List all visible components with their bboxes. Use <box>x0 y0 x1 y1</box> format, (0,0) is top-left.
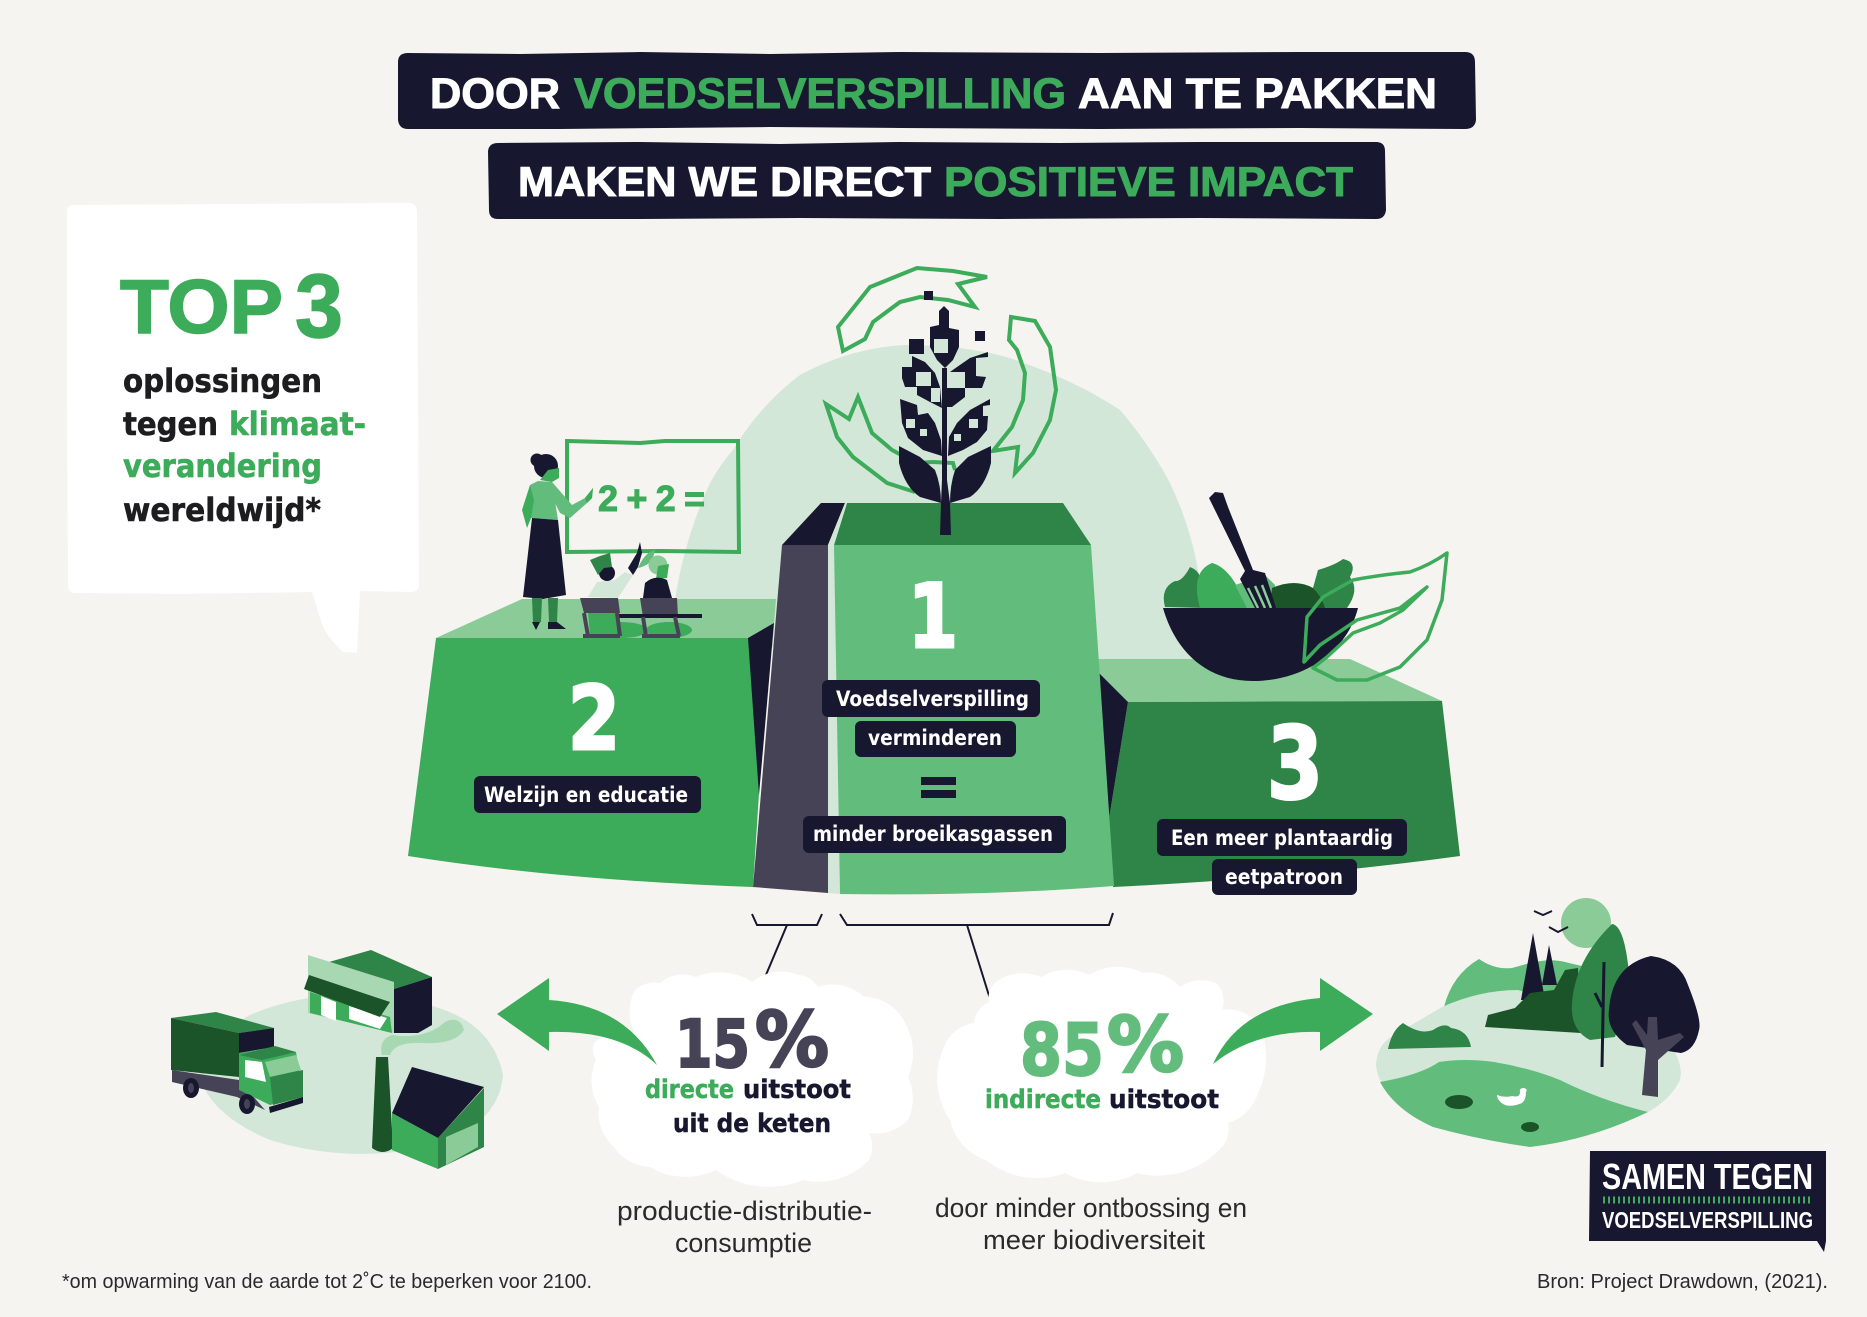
label: voedselverspilling verminderen: verminderen <box>868 726 1002 750</box>
dark tree <box>1609 956 1700 1097</box>
student 2 <box>638 550 672 598</box>
footnote: *om opwarming van de aarde tot 2˚C te beperken voor 2100. <box>62 1271 592 1293</box>
ground <box>1376 990 1681 1147</box>
icon: plant <box>899 291 991 535</box>
bracket: indirect emissions <box>840 913 1113 1002</box>
arrow: bottom left <box>826 397 955 492</box>
number 3: 3 <box>1267 705 1323 822</box>
caption: productie-distributie-consumptie <box>617 1196 872 1258</box>
middle leaves <box>900 399 942 456</box>
swan <box>1497 1088 1527 1106</box>
illustration: truck and factory <box>171 950 503 1169</box>
number 2: 2 <box>568 667 620 770</box>
logo: samen tegen voedselverspilling: VOEDSELVERSPILLING <box>1602 1207 1813 1233</box>
fork <box>1209 492 1276 608</box>
heading: top 3: TOP <box>120 265 283 350</box>
bracket: direct emissions <box>752 914 822 982</box>
truck <box>171 1012 303 1114</box>
tall tree <box>1572 924 1630 1067</box>
caption: indirecte uitstoot: uitstoot <box>1109 1085 1219 1115</box>
illustration: teacher and students <box>522 454 702 638</box>
teacher <box>522 454 593 630</box>
banner line 1: DOOR <box>430 70 560 118</box>
heading: top 3: 3 <box>295 257 343 357</box>
caption: directe uitstoot uit de keten: uitstoot <box>743 1075 851 1105</box>
subheading text: verandering <box>123 447 322 485</box>
cloud: 85 percent <box>937 967 1266 1182</box>
lawn bush <box>1388 1023 1471 1049</box>
label: voedselverspilling verminderen <box>822 680 1040 757</box>
salad leaves <box>1164 559 1354 608</box>
stat: 85%: % <box>1107 1000 1184 1089</box>
leaf outline <box>1304 553 1447 680</box>
school desks <box>580 598 702 638</box>
stat: 85%: 85 <box>1020 1008 1104 1092</box>
back hill <box>1444 959 1590 1007</box>
student 1 <box>588 542 642 598</box>
cloud: 15 percent <box>592 972 913 1187</box>
podium step 3 <box>1098 659 1460 895</box>
birds <box>1534 911 1568 932</box>
lower leaves <box>899 446 941 503</box>
caption: productie-distributie-consumptie: consumptie <box>675 1228 812 1258</box>
banner line 2: POSITIEVE IMPACT <box>944 158 1353 205</box>
arrow: right <box>1213 978 1373 1064</box>
label: welzijn en educatie <box>474 776 701 813</box>
banner line 1: AAN TE PAKKEN <box>1078 70 1437 118</box>
caption: directe uitstoot uit de keten <box>645 1075 851 1139</box>
caption: door minder ontbossing <box>935 1193 1247 1255</box>
lake <box>1380 1060 1648 1147</box>
speech bubble: top 3 <box>67 203 419 653</box>
label: een meer plantaardig eetpatroon: Een meer plantaardig <box>1171 826 1393 850</box>
bud <box>930 306 959 368</box>
source: Bron: Project Drawdown, (2021). <box>1537 1271 1828 1293</box>
bowl <box>1163 608 1358 681</box>
caption: directe uitstoot uit de keten: uit de keten <box>673 1109 831 1139</box>
label: minder broeikasgassen: minder broeikasgassen <box>813 822 1053 846</box>
subheading text <box>123 362 366 529</box>
stat: 15% <box>675 995 829 1084</box>
whiteboard: 2 + 2 = <box>598 478 705 519</box>
caption: productie-distributie-consumptie: productie-distributie- <box>617 1196 872 1226</box>
subheading text: tegen <box>123 405 218 443</box>
number 1: 1 <box>908 565 958 668</box>
barn <box>392 1067 484 1169</box>
caption: indirecte uitstoot: indirecte <box>985 1085 1101 1115</box>
ground blob <box>199 995 503 1154</box>
sun <box>1561 898 1611 948</box>
title banner <box>398 52 1476 219</box>
label: een meer plantaardig eetpatroon <box>1157 819 1407 895</box>
shop <box>304 950 432 1033</box>
label: welzijn en educatie: Welzijn en educatie <box>484 783 688 807</box>
banner line 1 <box>398 52 1476 129</box>
caption: directe uitstoot uit de keten: directe <box>645 1075 734 1105</box>
banner line 1: VOEDSELVERSPILLING <box>574 70 1066 118</box>
logo: samen tegen voedselverspilling: SAMEN TEGEN <box>1602 1156 1813 1197</box>
podium step 1 <box>753 503 1114 894</box>
equals sign <box>921 777 956 798</box>
banner line 2: MAKEN WE DIRECT <box>518 158 931 205</box>
label: een meer plantaardig eetpatroon: eetpatroon <box>1225 865 1343 889</box>
icon: salad bowl <box>1163 492 1447 681</box>
spires <box>1521 933 1557 1000</box>
subheading text: wereldwijd* <box>123 491 321 529</box>
illustration: landscape <box>1376 898 1700 1147</box>
arrow: left <box>497 978 657 1065</box>
chimney <box>372 1057 393 1152</box>
background hill <box>675 345 1215 680</box>
arrow: right <box>993 317 1056 473</box>
recycling arrows: behind plant <box>826 268 1056 492</box>
label: voedselverspilling verminderen: Voedselverspilling <box>836 687 1029 711</box>
caption: indirecte uitstoot <box>985 1085 1219 1115</box>
heading: top 3 <box>120 257 343 357</box>
lily pads <box>1445 1095 1539 1132</box>
whiteboard <box>567 441 739 552</box>
caption: door minder ontbossing: door minder ontbossing en <box>935 1193 1247 1223</box>
stat: 15%: % <box>755 995 829 1084</box>
subheading text: klimaat- <box>229 405 366 443</box>
arrow: top <box>838 268 987 351</box>
stat: 85% <box>1020 1000 1184 1092</box>
illustration: classroom <box>567 441 739 552</box>
subheading text: oplossingen <box>123 362 322 400</box>
dark bushes <box>1485 968 1581 1033</box>
stat: 15%: 15 <box>675 1006 750 1083</box>
label: minder broeikasgassen <box>803 816 1066 853</box>
banner line 2 <box>488 142 1386 219</box>
podium step 2 <box>408 599 776 887</box>
logo: samen tegen voedselverspilling <box>1589 1151 1826 1252</box>
upper leaves <box>902 356 942 408</box>
caption: door minder ontbossing: meer biodiversiteit <box>983 1225 1205 1255</box>
chimney smoke <box>381 1020 464 1055</box>
